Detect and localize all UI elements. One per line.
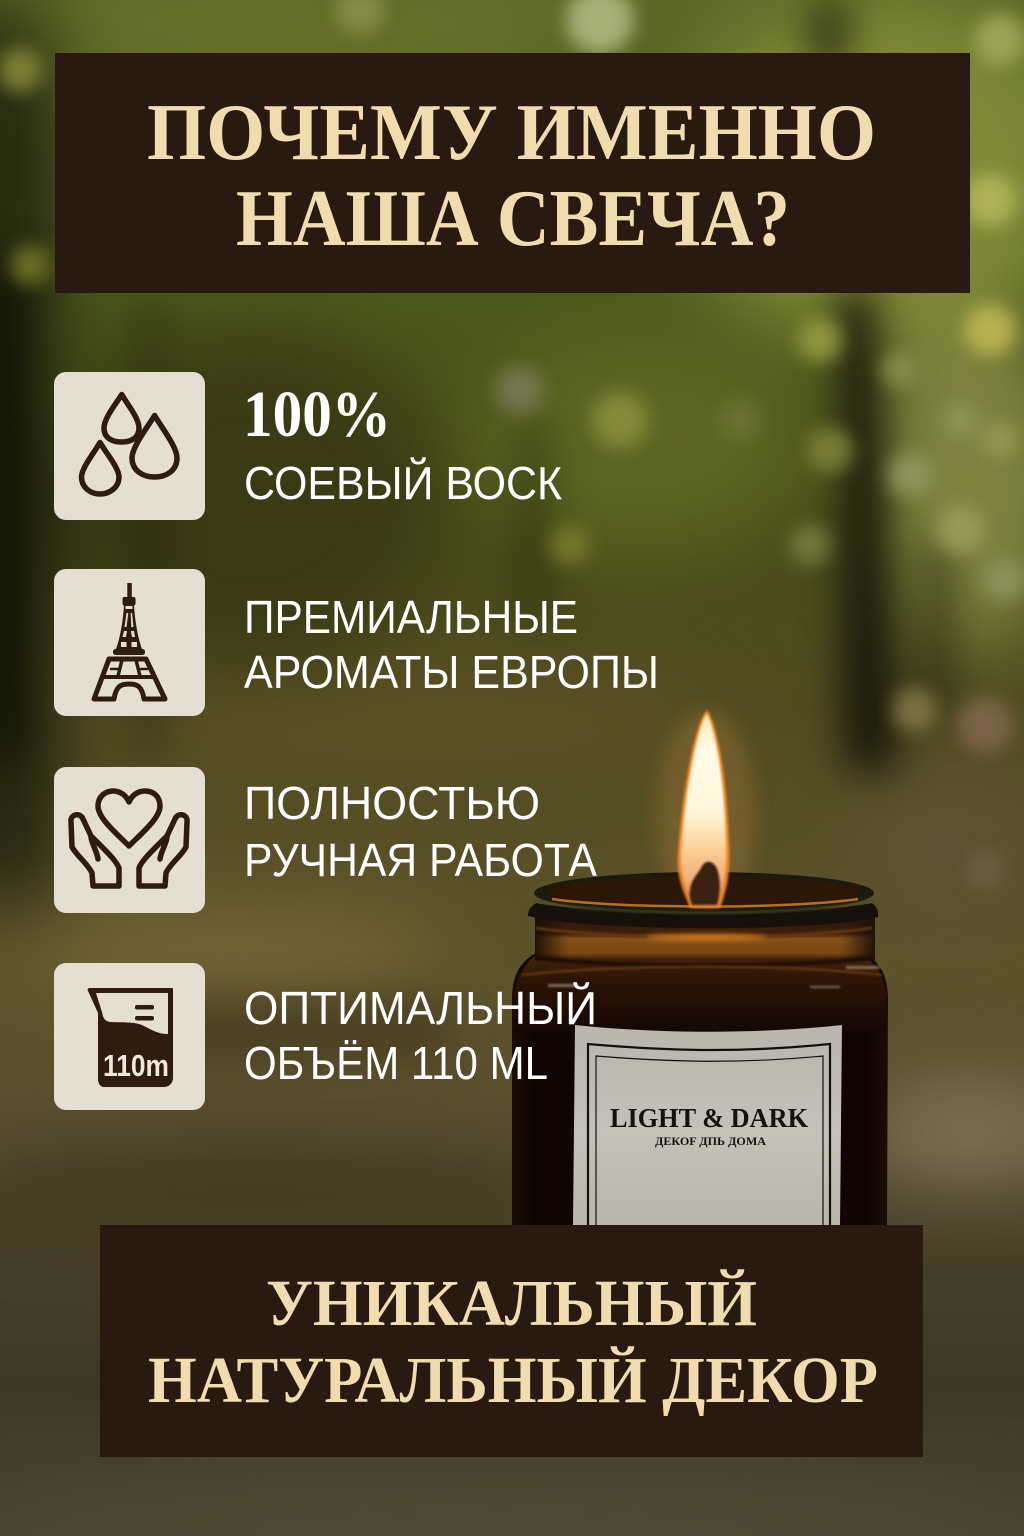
feature 2: premium aromas [54, 569, 659, 716]
icon: hands with heart [54, 767, 205, 913]
text: handmade [244, 777, 597, 886]
text: 100% soy wax [243, 378, 562, 509]
icon: measuring beaker [54, 963, 205, 1110]
text: volume [244, 982, 597, 1089]
jar rim [528, 872, 878, 940]
icon: water drops [54, 372, 205, 520]
text: volume: ОБЪЁМ 110 ML [244, 1037, 548, 1089]
text: handmade: РУЧНАЯ РАБОТА [244, 834, 597, 886]
slogan: НАТУРАЛЬНЫЙ ДЕКОР [148, 1344, 878, 1417]
text: premium aromas [244, 591, 659, 698]
label brand: LIGHT & DARK [610, 1103, 808, 1133]
icon: Eiffel tower [54, 569, 205, 716]
wick [690, 862, 720, 905]
panel: bottom slogan [100, 1225, 923, 1457]
text: handmade: ПОЛНОСТЬЮ [244, 777, 540, 829]
flame [678, 710, 730, 908]
title: НАША СВЕЧА? [236, 175, 790, 263]
label frame [588, 1044, 830, 1226]
feature 4: volume [54, 963, 597, 1110]
feature 3: handmade [54, 767, 597, 913]
slogan [148, 1267, 878, 1417]
flame glow [656, 710, 756, 920]
text: premium aromas: ПРЕМИАЛЬНЫЕ [244, 591, 578, 643]
text: 100% soy wax: 100% [243, 378, 391, 451]
label brand [610, 1103, 808, 1148]
title [147, 89, 876, 263]
candle jar [512, 710, 888, 1226]
jar neck [522, 912, 882, 975]
label brand: ДЕКОF ДПЬ ДОМА [655, 1136, 767, 1148]
jar label [573, 1025, 842, 1226]
feature 1: soy wax [54, 372, 562, 520]
jar shoulder [514, 953, 886, 1032]
title: ПОЧЕМУ ИМЕННО [147, 89, 876, 177]
text: volume: ОПТИМАЛЬНЫЙ [244, 982, 597, 1034]
jar body [512, 953, 888, 1226]
panel: top title [55, 53, 970, 293]
slogan: УНИКАЛЬНЫЙ [266, 1267, 757, 1340]
text: premium aromas: АРОМАТЫ ЕВРОПЫ [244, 646, 659, 698]
icon: measuring beaker: 110m [103, 1048, 169, 1083]
glass highlights [548, 966, 880, 988]
text: 100% soy wax: СОЕВЫЙ ВОСК [244, 457, 562, 509]
